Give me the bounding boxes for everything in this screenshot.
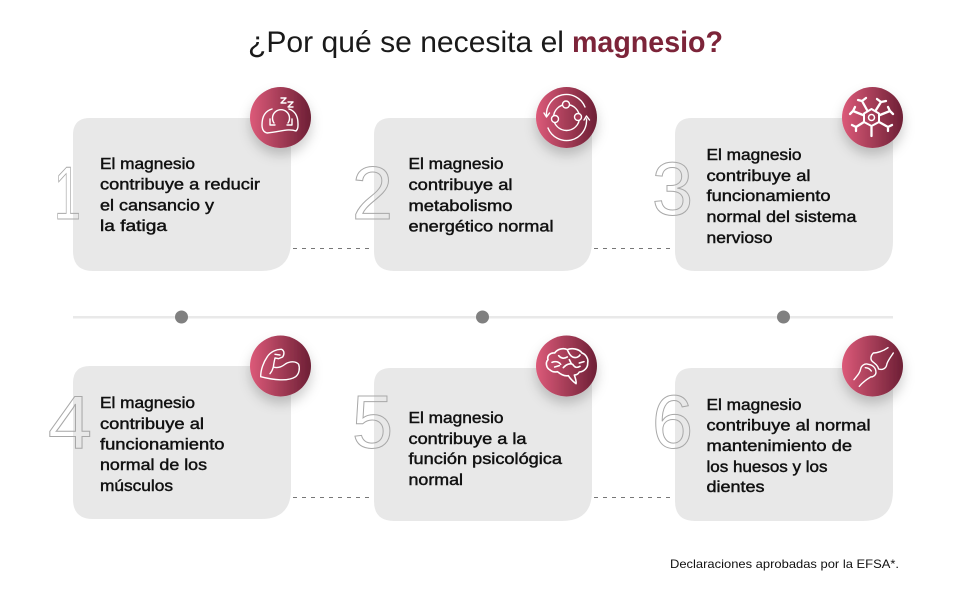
text: card 5: contribuye a la (408, 431, 527, 448)
panel: card 6 (652, 336, 903, 521)
text: card 1: contribuye a reducir (100, 176, 261, 194)
text: card 5: función psicológica (408, 451, 562, 468)
text: card 1 (100, 156, 261, 235)
number 3: 3 (652, 147, 693, 231)
text: card 5: normal (408, 472, 463, 489)
text: card 2: metabolismo (408, 198, 513, 215)
text: card 3: funcionamiento (706, 188, 831, 205)
text: card 4: normal de los (100, 457, 207, 474)
text: card 1: el cansancio y (100, 198, 214, 214)
text: card 2: El magnesio (408, 156, 504, 173)
panel: card 5 (352, 336, 597, 521)
text: card 4: El magnesio (100, 395, 195, 412)
text: card 4: funcionamiento (100, 436, 225, 454)
icon: tired person (250, 87, 311, 148)
icon: brain (536, 336, 597, 396)
title: magnesio? (572, 26, 723, 59)
title (248, 26, 723, 59)
panel: card 3 (652, 87, 903, 271)
text: card 3: El magnesio (706, 147, 802, 164)
text: card 3 (706, 147, 857, 247)
text: card 4 (100, 395, 225, 495)
panel: card 2 (352, 87, 597, 271)
text: card 6: contribuye al normal (706, 418, 870, 434)
dashed connectors (293, 248, 675, 498)
footnote: Declaraciones aprobadas por la EFSA*. (670, 557, 899, 571)
icon: metabolism cycle (536, 87, 597, 148)
text: card 4: músculos (100, 478, 173, 495)
text: card 6: dientes (706, 479, 764, 496)
title: ¿Por qué se necesita el (248, 26, 564, 59)
icon: flexed arm (250, 336, 311, 396)
number 5: 5 (352, 380, 393, 464)
number 4: 4 (48, 380, 92, 464)
text: card 6: mantenimiento de (706, 438, 852, 455)
icon: neuron (842, 87, 903, 148)
text: card 3: nervioso (706, 230, 773, 247)
text: card 3: normal del sistema (706, 209, 857, 226)
panel: card 1 (54, 87, 311, 271)
text: card 5: El magnesio (408, 410, 504, 427)
number 6: 6 (652, 380, 693, 464)
text: card 2: energético normal (408, 218, 554, 236)
text: card 6 (706, 397, 870, 496)
icon: bone joint (842, 336, 903, 396)
text: card 3: contribuye al (706, 168, 810, 185)
text: card 1: la fatiga (100, 218, 167, 235)
number 1: 1 (54, 151, 81, 235)
central timeline (73, 310, 893, 324)
text: card 4: contribuye al (100, 416, 204, 433)
text: card 6: los huesos y los (706, 459, 828, 476)
text: card 6: El magnesio (706, 397, 802, 414)
text: card 2 (408, 156, 554, 236)
text: card 1: El magnesio (100, 156, 195, 173)
text: card 2: contribuye al (408, 177, 512, 194)
number 2: 2 (352, 151, 393, 235)
panel: card 4 (48, 336, 311, 519)
text: card 5 (408, 410, 562, 489)
